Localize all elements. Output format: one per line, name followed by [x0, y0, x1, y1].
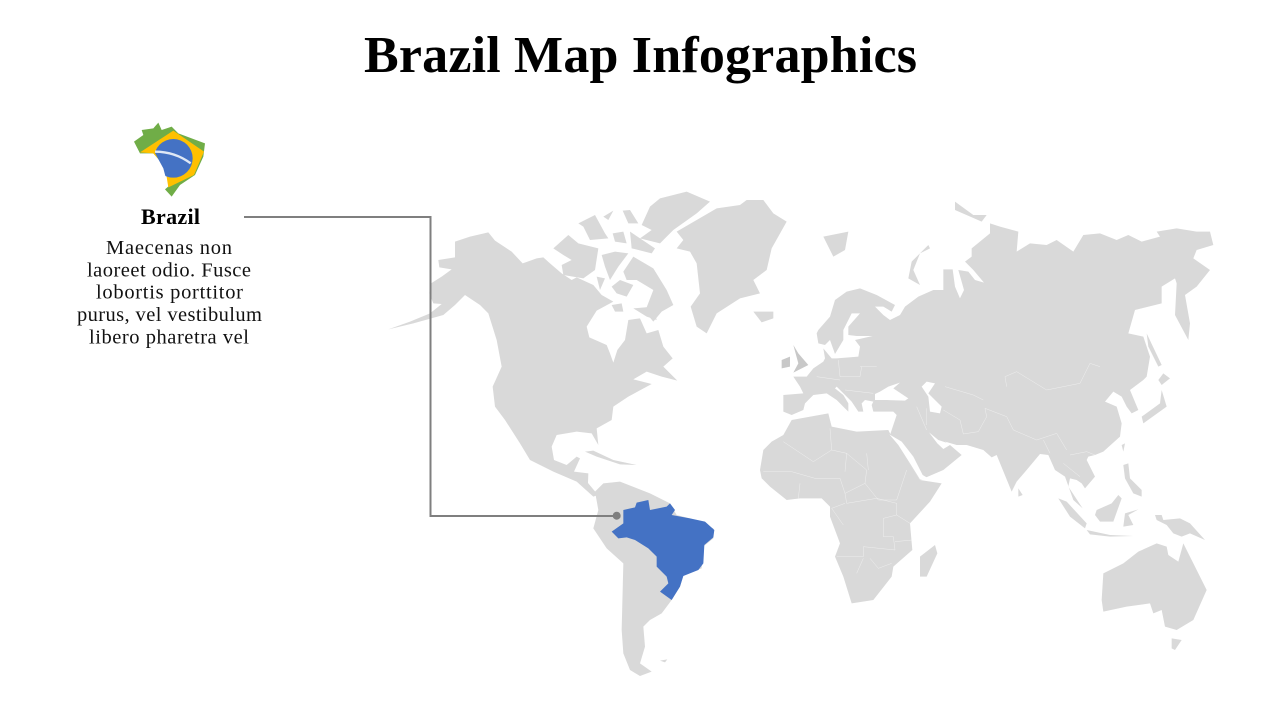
- body text: [77, 237, 262, 348]
- Sri Lanka: [1018, 488, 1023, 497]
- body text: laoreet odio. Fusce: [87, 260, 251, 282]
- Ireland: [782, 357, 790, 368]
- Red Sea and Gulf of Aden: [889, 434, 942, 479]
- Svalbard: [823, 232, 848, 257]
- Philippines: [1123, 463, 1142, 497]
- label: Brazil: Brazil: [141, 204, 200, 229]
- Black Sea: [875, 383, 908, 401]
- New Guinea: [1155, 515, 1205, 540]
- connector line from label to Brazil: [244, 217, 621, 520]
- Cuba: [585, 451, 637, 465]
- Brazil highlighted on the map: [612, 500, 714, 600]
- body text: Maecenas non: [106, 237, 232, 259]
- African borders: [763, 428, 912, 573]
- body text: libero pharetra vel: [89, 326, 249, 348]
- Taiwan: [1122, 443, 1125, 452]
- Sumatra: [1058, 498, 1087, 528]
- Sulawesi: [1123, 509, 1138, 527]
- Borneo: [1095, 495, 1122, 522]
- South America: [593, 482, 713, 676]
- Britain: [793, 345, 808, 373]
- Greenland: [677, 200, 787, 333]
- Madagascar: [920, 545, 937, 577]
- Tasmania: [1172, 638, 1182, 650]
- world map: [388, 192, 1213, 676]
- Iceland: [753, 312, 773, 322]
- icon: Brazil flag map: [134, 123, 205, 197]
- Africa, Southeast Asia and Oceania: [760, 413, 1207, 650]
- Java: [1087, 530, 1133, 537]
- Persian Gulf: [929, 432, 953, 449]
- Australia: [1102, 543, 1207, 630]
- body text: purus, vel vestibulum: [77, 304, 262, 326]
- North America mainland: [388, 232, 677, 497]
- Sakhalin: [1147, 333, 1162, 367]
- Arctic islands, Greenland and Iceland: [553, 192, 787, 333]
- Eurasia: [782, 202, 1213, 508]
- body text: lobortis porttitor: [96, 282, 243, 304]
- Asian borders: [917, 387, 1095, 477]
- Japan: [1142, 373, 1170, 423]
- title: Brazil Map Infographics: [364, 27, 917, 84]
- Caspian Sea: [922, 382, 942, 413]
- Novaya Zemlya: [908, 245, 930, 285]
